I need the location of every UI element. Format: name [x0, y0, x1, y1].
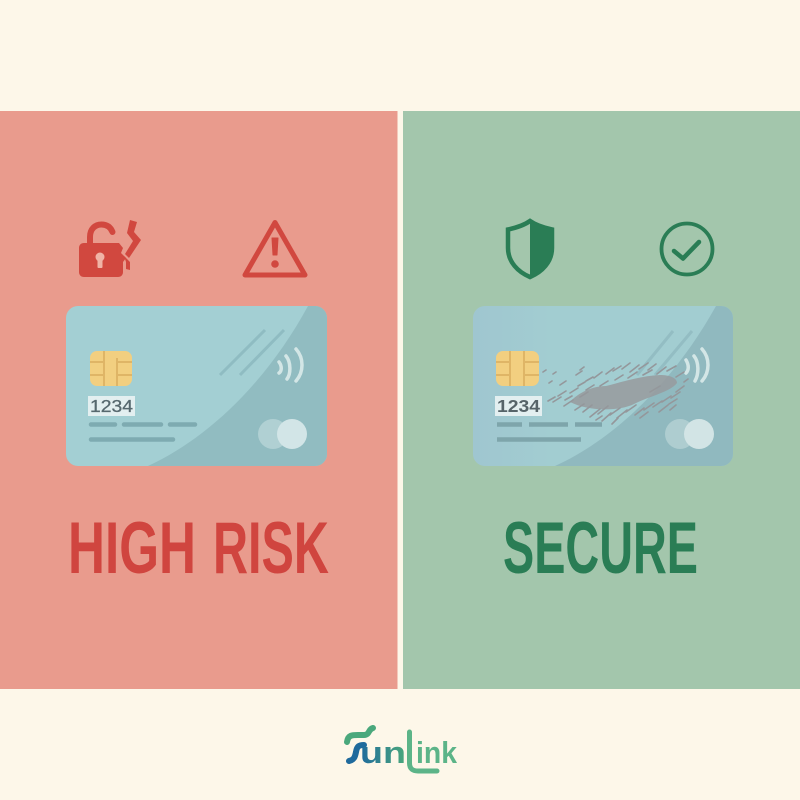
- card text lines: [497, 424, 602, 440]
- card brand circles: [665, 419, 714, 449]
- card number: 1234: [497, 396, 540, 416]
- card glare lines: [637, 331, 692, 375]
- heading: high risk: [68, 508, 329, 589]
- card brand circles: [258, 419, 307, 449]
- logo stem: [349, 745, 364, 761]
- logo long l tail: [410, 732, 437, 771]
- panel: secure: [403, 111, 800, 689]
- card number: 1234: [90, 396, 133, 416]
- card chip: [496, 351, 539, 386]
- logo: [347, 728, 458, 771]
- contactless icon: [686, 349, 708, 381]
- card glare lines: [220, 330, 284, 375]
- heading: secure: SECURE: [503, 508, 698, 589]
- logo wordmark link: ink: [416, 735, 458, 770]
- heading: high risk: RISK: [213, 508, 329, 589]
- panel: high risk: [0, 111, 398, 689]
- contactless icon: [279, 349, 302, 381]
- icon: warning triangle: [245, 222, 305, 275]
- icon: check circle: [662, 224, 712, 274]
- icon: shield: [508, 221, 552, 277]
- credit card: high risk: [66, 306, 327, 466]
- credit card: secure: [473, 306, 733, 466]
- icon: broken padlock: [79, 220, 141, 277]
- logo swoosh: [347, 728, 373, 742]
- card chip: [90, 351, 132, 386]
- scratched area: [543, 363, 688, 424]
- heading: high risk: HIGH: [68, 508, 196, 589]
- card text lines: [91, 424, 195, 440]
- logo wordmark: un: [360, 735, 406, 770]
